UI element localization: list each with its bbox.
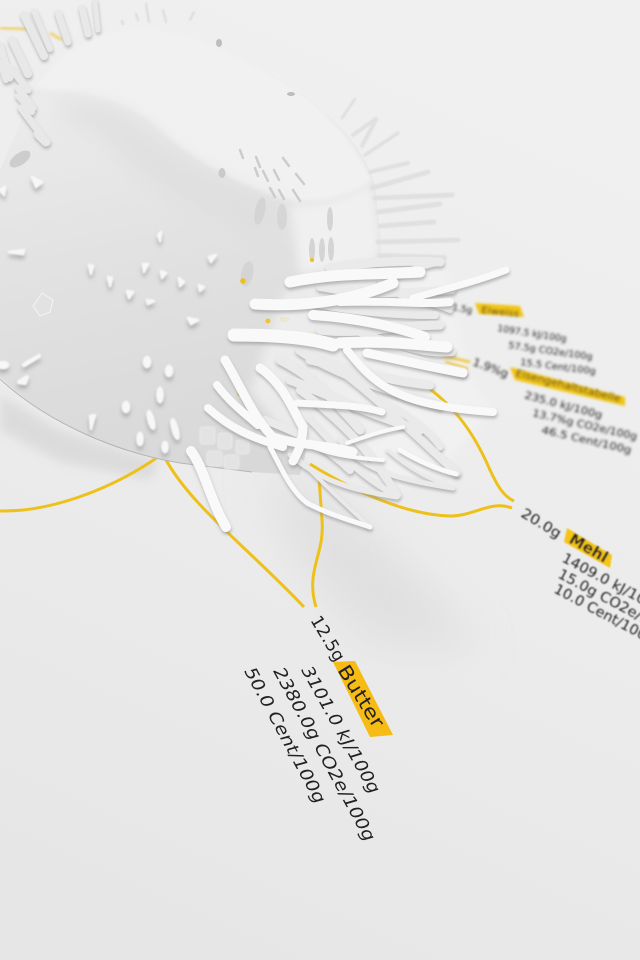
- stats: 15.5 Cent/100g: [520, 358, 596, 377]
- cost: 50.0 Cent/100g: [240, 664, 329, 807]
- Mehl name: Mehl: [566, 530, 611, 566]
- label: Butter amount: 12.5g: [306, 612, 349, 665]
- cast shadow of the bowl: [0, 395, 480, 650]
- perforations in bowl: [7, 39, 334, 396]
- tendrils: soft mass over the bowl: [250, 270, 385, 450]
- yellow connector lines: [0, 28, 514, 607]
- tendrils: soft mass beyond the bowl edge: [340, 265, 490, 490]
- CO2: 2380.0g CO2e/100g: [269, 664, 379, 845]
- stats: [497, 324, 596, 377]
- stats: 235.0 kJ/100g: [523, 390, 603, 422]
- yellow peeks through holes: [237, 258, 314, 396]
- line: left branch: [0, 457, 158, 511]
- tag: [475, 303, 524, 317]
- line: to Mehl lower: [310, 464, 512, 516]
- bowl top face: [34, 27, 372, 201]
- bowl ridge shadow: [60, 100, 285, 240]
- name: Eiweiss: [481, 305, 520, 320]
- line: to Butter right: [313, 478, 322, 607]
- stats: [523, 390, 638, 457]
- amount: 1.5g: [451, 303, 473, 316]
- bowl shape: [0, 27, 381, 475]
- stats: 57.5g CO2e/100g: [508, 341, 593, 363]
- line: top left: [0, 28, 62, 40]
- Mehl stats: [551, 550, 640, 648]
- label: Eisengehalt (blurred): [471, 356, 638, 457]
- tendrils: main bundle back layer: [265, 261, 463, 525]
- bowl body: [0, 27, 381, 475]
- name: Eisengehaltstabelle: [514, 368, 622, 405]
- energy: 3101.0 kJ/100g: [297, 663, 384, 797]
- label: Mehl: [518, 506, 612, 568]
- line: to Eisengehalt: [440, 355, 470, 369]
- Butter name: Butter: [333, 661, 389, 732]
- faint cells in the bowl wall: [200, 352, 338, 469]
- Mehl amount: 20.0g: [518, 506, 564, 542]
- stats: 1097.5 kJ/100g: [497, 324, 567, 345]
- line: to Mehl upper: [420, 382, 514, 501]
- amount: 1.9%g: [471, 356, 510, 380]
- bowl right side: [290, 180, 381, 275]
- line: to Butter left: [165, 458, 304, 607]
- label: Eiweiss (blurred): [451, 303, 596, 377]
- tendrils: upper right fringe: [342, 99, 458, 258]
- stats: 46.5 Cent/100g: [540, 425, 632, 457]
- tendrils: main bundle front layer: [191, 270, 506, 527]
- Butter tag: [333, 661, 393, 737]
- tag: [510, 367, 625, 406]
- Mehl tag: [564, 528, 612, 568]
- tendrils: top faint fringe: [122, 4, 194, 24]
- stats: 13.7%g CO2e/100g: [531, 408, 638, 443]
- tendrils: top left fringe: [0, 1, 98, 142]
- bowl rim line: [0, 379, 252, 472]
- Butter stats: [240, 663, 384, 845]
- short spikes on bowl: [0, 177, 216, 452]
